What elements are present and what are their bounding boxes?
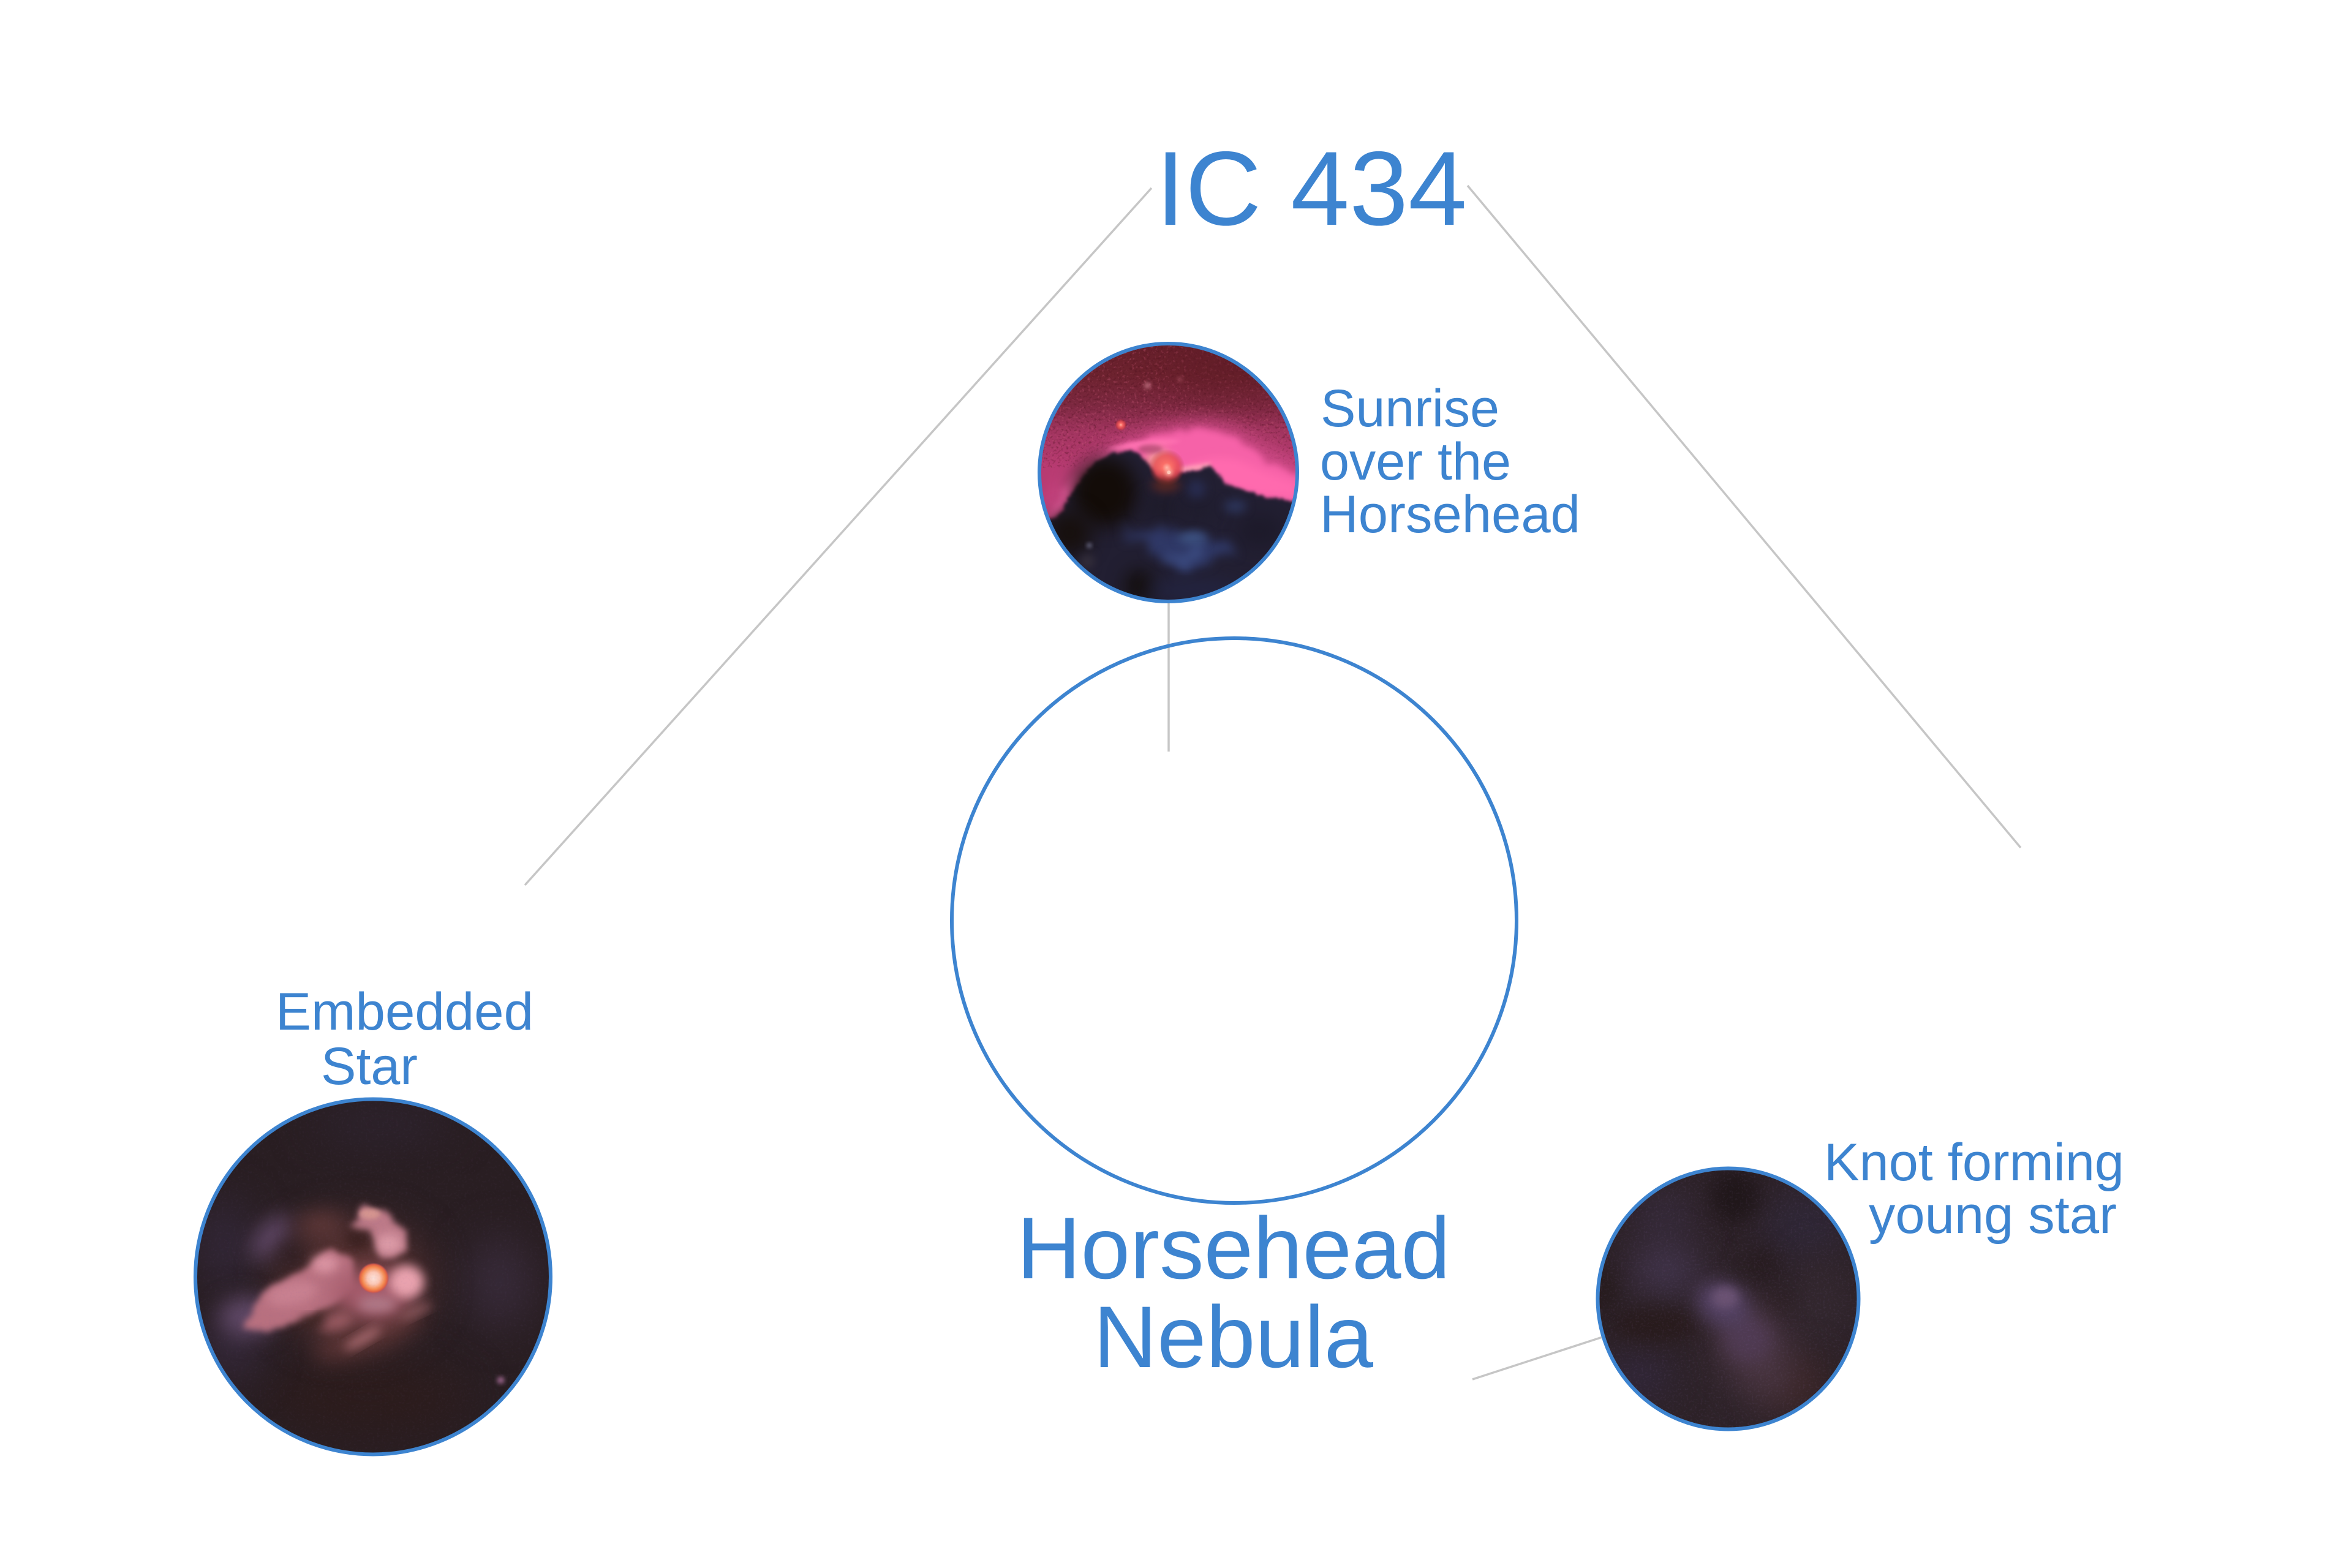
label: Embedded Star: Embedded: [276, 982, 533, 1041]
Sunrise inset outline: [1039, 344, 1297, 601]
Knot inset outline: [1597, 1169, 1858, 1430]
label: Sunrise over the Horsehead: [1320, 379, 1580, 544]
connector line: knot inset to Horsehead label: [1472, 1337, 1602, 1379]
connector line: sunrise inset to Horsehead circle: [1167, 603, 1170, 752]
infographic canvas: [194, 151, 2120, 1457]
heading: Horsehead Nebula: Nebula: [1093, 1289, 1373, 1386]
label: Knot forming young star: young star: [1869, 1186, 2117, 1245]
label: Sunrise over the Horsehead: Horsehead: [1320, 485, 1580, 544]
label: Sunrise over the Horsehead: over the: [1320, 432, 1511, 491]
inset: Knot forming young star image: [1600, 1170, 1857, 1427]
label: Embedded Star: Star: [321, 1037, 418, 1096]
connector line: IC 434 to embedded star: [525, 188, 1152, 885]
title: IC 434: IC 434: [1156, 130, 1467, 247]
connector line: IC 434 to right side: [1468, 186, 2021, 848]
label: Sunrise over the Horsehead: Sunrise: [1321, 379, 1499, 438]
label: Knot forming young star: [1824, 1133, 2124, 1245]
empty Horsehead Nebula circle: [952, 638, 1517, 1203]
label: Embedded Star: [276, 982, 533, 1096]
label: Knot forming young star: Knot forming: [1824, 1133, 2124, 1192]
heading: Horsehead Nebula: Horsehead: [1017, 1200, 1450, 1297]
inset: Sunrise over the Horsehead image: [1041, 345, 1295, 600]
inset: Embedded Star image: [189, 1093, 556, 1461]
heading: Horsehead Nebula: [1017, 1200, 1450, 1386]
Embedded Star inset outline: [195, 1099, 551, 1454]
